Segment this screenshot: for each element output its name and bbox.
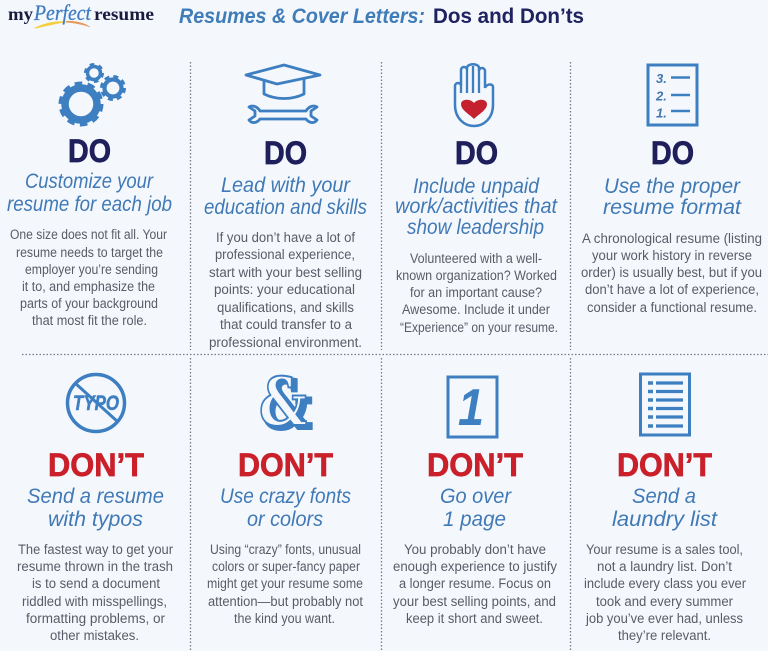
logo: my [8, 4, 33, 24]
body text: formatting problems, or [26, 611, 165, 627]
logo [8, 0, 154, 28]
icon: numbered list: 3. [656, 71, 667, 86]
body text: start with your best selling [209, 265, 362, 281]
body text: colors or super-fancy paper [212, 559, 360, 575]
header [8, 0, 584, 28]
heading: Go over [440, 484, 512, 508]
body text: professional experience, [215, 247, 355, 263]
heading [440, 484, 512, 531]
heading [7, 169, 172, 216]
label: don't: DON’T [617, 447, 712, 483]
icon: gears [60, 64, 124, 124]
body text: a longer resume. Focus on [399, 576, 551, 592]
heading: Use the proper [604, 174, 741, 198]
body text: “Experience” on your resume. [400, 320, 558, 336]
body text: not a laundry list. Don’t [597, 559, 732, 575]
body text [209, 230, 362, 351]
heading: or colors [247, 507, 323, 531]
body text: is to send a document [32, 576, 160, 592]
body text: they’re relevant. [618, 628, 711, 644]
heading: 1 page [443, 507, 506, 531]
body text [581, 231, 762, 316]
body text: qualifications, and skills [217, 300, 354, 316]
body text: parts of your background [20, 296, 158, 312]
logo: resume [94, 4, 154, 24]
heading: Customize your [25, 169, 154, 193]
heading: Lead with your [221, 173, 351, 197]
panel: do resume format [581, 65, 762, 316]
label: do: DO [68, 133, 111, 169]
heading: Use crazy fonts [220, 484, 351, 508]
heading: resume for each job [7, 192, 172, 216]
icon: numbered list: 2. [655, 88, 667, 104]
body text: You probably don’t have [404, 542, 546, 558]
body text: enough experience to justify [393, 559, 558, 575]
panel: do unpaid work [395, 64, 558, 336]
heading [395, 174, 558, 239]
panel: don't crazy fonts [207, 363, 363, 627]
body text: resume needs to target the [16, 245, 163, 261]
label: don't: DON’T [427, 447, 523, 483]
body text: employer you’re sending [25, 262, 158, 278]
panel: do customize [7, 64, 172, 329]
label: don't: DON’T [48, 447, 144, 483]
body text: points: your educational [214, 282, 355, 298]
body text [17, 542, 173, 644]
body text [393, 542, 558, 627]
body text: the kind you want. [234, 611, 335, 627]
body text: that most fit the role. [32, 313, 147, 329]
heading: Send a resume [27, 484, 164, 508]
body text [396, 251, 558, 336]
body text: Volunteered with a well- [410, 251, 542, 267]
label: do: DO [651, 135, 694, 171]
icon: hand with heart [455, 64, 493, 126]
body text: attention—but probably not [208, 594, 363, 610]
heading: education and skills [204, 195, 367, 219]
logo: Perfect [33, 0, 92, 25]
heading: resume format [603, 195, 742, 219]
label: do: DO [455, 135, 498, 171]
heading: Send a [632, 484, 696, 508]
body text: consider a functional resume. [587, 300, 757, 316]
label: do: DO [264, 135, 307, 171]
icon: crossed out typo: TYPO [73, 392, 119, 415]
panel: don't over 1 page [393, 377, 558, 627]
body text: Using “crazy” fonts, unusual [210, 542, 361, 558]
body text: keep it short and sweet. [406, 611, 543, 627]
icon: numbered list [648, 65, 697, 125]
body text: your work history in reverse [592, 248, 752, 264]
title: Dos and Don’ts [433, 4, 584, 28]
heading [204, 173, 367, 219]
icon: ampersand: & [259, 363, 307, 441]
heading [27, 484, 164, 531]
heading: show leadership [407, 215, 544, 239]
label: don't: DON’T [238, 447, 333, 483]
panel: do lead with education [204, 65, 367, 351]
heading [603, 174, 742, 219]
body text: might get your resume some [207, 576, 363, 592]
body text: that could transfer to a [220, 317, 352, 333]
icon: long list [640, 374, 690, 435]
body text [207, 542, 363, 627]
body text: include every class you ever [584, 576, 746, 592]
heading [612, 484, 718, 531]
heading: laundry list [612, 507, 718, 531]
body text: The fastest way to get your [18, 542, 173, 558]
body text: known organization? Worked [396, 268, 557, 284]
body text: If you don’t have a lot of [216, 230, 355, 246]
body text: riddled with misspellings, [22, 594, 167, 610]
heading [220, 484, 351, 531]
body text: for an important cause? [410, 285, 542, 301]
title: Resumes & Cover Letters: [179, 4, 425, 28]
heading: work/activities that [395, 194, 558, 218]
icon: ampersand: & [262, 366, 312, 444]
body text [10, 227, 167, 329]
body text: it to, and emphasize the [22, 279, 155, 295]
icon: numbered list: 1. [656, 106, 667, 120]
body text: your best selling points, and [393, 594, 556, 610]
body text: One size does not fit all. Your [10, 227, 167, 243]
icon: one page [448, 377, 497, 437]
body text [584, 542, 746, 644]
title [179, 4, 584, 28]
icon: one page: 1 [458, 379, 484, 437]
panel: don't laundry list [584, 374, 746, 644]
body text: Your resume is a sales tool, [586, 542, 743, 558]
heading: Include unpaid [413, 174, 540, 198]
body text: took and every summer [596, 594, 733, 610]
heading: with typos [48, 507, 143, 531]
body text: professional environment. [209, 335, 362, 351]
icon: graduation cap and wrench [246, 65, 320, 123]
body text: resume thrown in the trash [17, 559, 173, 575]
panel: don't typos [17, 374, 173, 644]
body text: Awesome. Include it under [402, 302, 550, 318]
icon: crossed out typo [68, 374, 124, 432]
body text: job you’ve ever had, unless [585, 611, 743, 627]
body text: other mistakes. [50, 628, 139, 644]
